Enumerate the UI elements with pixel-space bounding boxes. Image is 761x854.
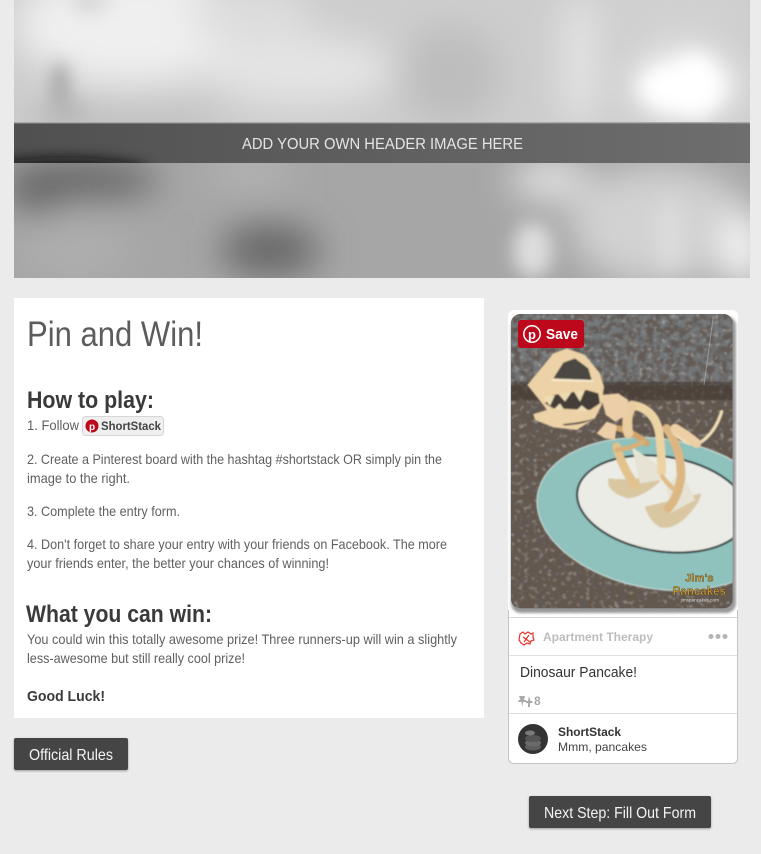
banner caption: ADD YOUR OWN HEADER IMAGE HERE	[242, 136, 523, 153]
step 3: 3. Complete the entry form.	[27, 503, 180, 519]
button: next step: Next Step: Fill Out Form	[544, 805, 696, 822]
prize description	[27, 631, 457, 666]
pinterest follow button: p	[89, 422, 95, 433]
save button: Save	[546, 327, 578, 343]
board name: Mmm, pancakes	[558, 740, 647, 754]
panel: instructions	[14, 298, 484, 718]
watermark: Pancakes	[673, 584, 726, 598]
step 2: image to the right.	[27, 470, 130, 486]
dinosaur legs and spine	[617, 405, 722, 508]
prize description: less-awesome but still really cool prize!	[27, 650, 245, 666]
step 2	[27, 451, 442, 486]
pin source row: Apartment Therapy	[543, 630, 653, 644]
pin count	[518, 694, 541, 708]
pinner avatar	[518, 724, 548, 754]
pinterest follow button: ShortStack	[101, 421, 162, 433]
step 4: 4. Don't forget to share your entry with your friends on Facebook. The more	[27, 536, 447, 552]
watermark	[673, 573, 726, 596]
prize description: You could win this totally awesome prize! Three runners-up will win a slightly	[27, 631, 457, 647]
dinosaur neck	[600, 393, 628, 422]
title: Pin and Win!	[27, 315, 203, 354]
skull	[527, 348, 604, 430]
header banner	[14, 122, 750, 163]
pinterest follow button	[82, 416, 164, 436]
step 2: 2. Create a Pinterest board with the hashtag #shortstack OR simply pin the	[27, 451, 442, 467]
photo shadow	[511, 316, 736, 613]
dinosaur feet	[608, 478, 660, 499]
save button	[518, 320, 584, 348]
pin card lower background	[508, 610, 738, 764]
step 1: 1. Follow	[27, 417, 80, 433]
dinosaur	[527, 348, 722, 528]
button: next step	[529, 796, 711, 828]
save button: p	[528, 327, 536, 342]
plate	[536, 436, 733, 592]
pin count: 8	[534, 694, 541, 708]
heading: how to play: How to play:	[27, 387, 154, 414]
pin image frame	[508, 310, 738, 617]
panel: pin card	[508, 310, 761, 764]
pinner name: ShortStack	[558, 725, 621, 739]
pin source row	[508, 610, 738, 656]
button: official rules	[14, 738, 128, 770]
pin description: Dinosaur Pancake!	[520, 665, 637, 681]
watermark: Jim's	[685, 573, 714, 585]
step 4: your friends enter, the better your chances of winning!	[27, 555, 329, 571]
header image placeholder	[0, 0, 761, 290]
sign-off: Good Luck!	[27, 688, 105, 705]
heading: what you can win: What you can win:	[26, 601, 212, 628]
photo: dinosaur pancake	[511, 314, 733, 608]
button: official rules: Official Rules	[29, 747, 113, 764]
photo: dinosaur pancake: jimspancakes.com	[680, 598, 719, 603]
step 4	[27, 536, 447, 571]
